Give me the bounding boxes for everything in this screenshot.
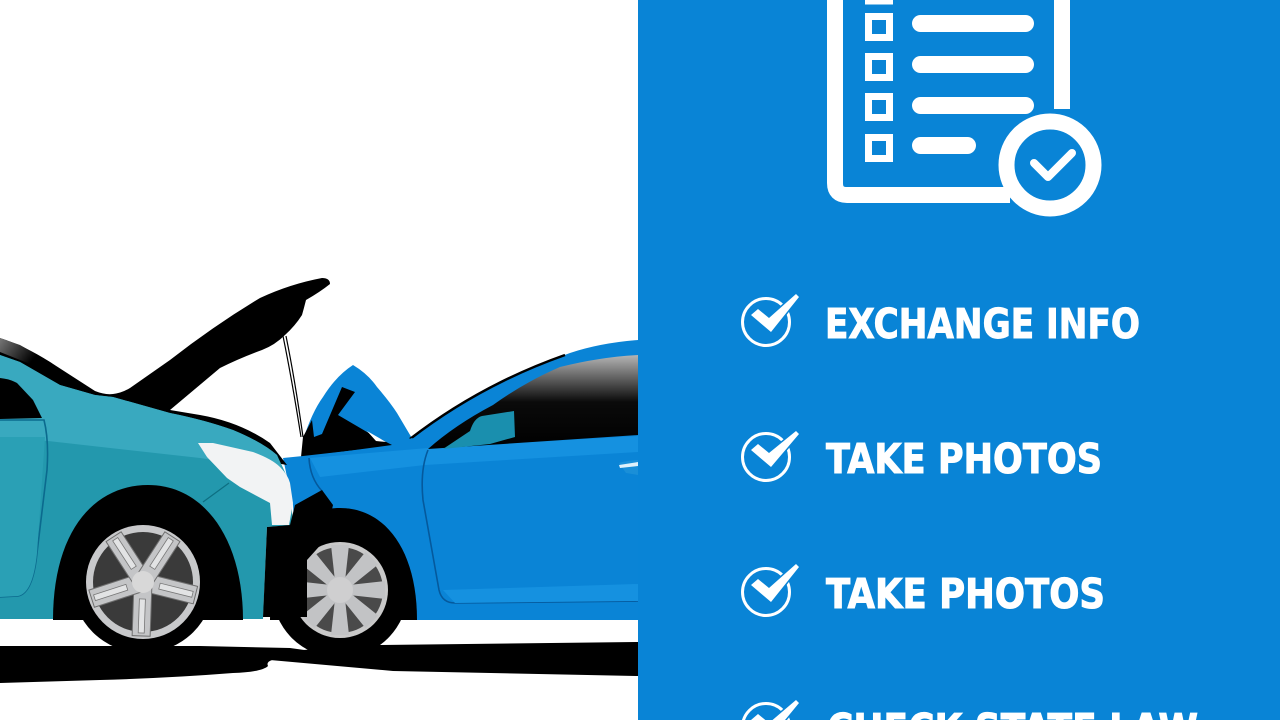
- teal car headlight: [198, 443, 293, 525]
- teal car wheel: [72, 511, 214, 653]
- blue car crumpled hood: [303, 365, 413, 460]
- clipboard check badge: [1006, 122, 1094, 208]
- item: exchange info: [742, 294, 1140, 348]
- teal car hood strut: [283, 336, 301, 437]
- item: check state law: [742, 700, 1198, 720]
- clipboard text lines: [912, 15, 1034, 154]
- bumper in black: [263, 490, 333, 617]
- ground shadow: left car: [0, 646, 340, 683]
- label: EXCHANGE INFO: [825, 300, 1140, 348]
- blue car door outline: [422, 450, 638, 603]
- blue car engine bay: [301, 387, 392, 457]
- blue car door handle: [619, 460, 638, 475]
- clipboard outline: [835, 0, 1062, 195]
- teal car window: [0, 378, 42, 419]
- label: TAKE PHOTOS: [826, 570, 1105, 618]
- blue car roof: [410, 340, 638, 450]
- item: take photos repeated: [742, 564, 1105, 618]
- teal car light upper band: [0, 355, 283, 470]
- teal car raised hood and roof in black: [0, 278, 330, 465]
- icon: clipboard checklist: [835, 0, 1094, 208]
- clipboard checkboxes: [868, 0, 890, 158]
- blue car light belt band: [310, 436, 638, 477]
- icon: check mark: [742, 700, 799, 720]
- blue car tyre: [272, 522, 408, 658]
- blue car window: [428, 355, 638, 449]
- teal car: [0, 278, 333, 653]
- blue car: [270, 340, 638, 658]
- blue car mirror: [443, 411, 515, 449]
- label: TAKE PHOTOS: [826, 435, 1102, 483]
- teal car rim: [86, 525, 200, 639]
- icon: check mark: [742, 431, 799, 480]
- teal car wheel arch: [53, 485, 243, 620]
- teal car tyre: [72, 511, 214, 653]
- teal car fender crease: [203, 483, 229, 502]
- teal car body: [0, 355, 293, 619]
- ground shadow: right car: [270, 642, 638, 676]
- blue car wheel arch: [270, 508, 417, 620]
- blue car wheel: [272, 522, 408, 658]
- icon: check mark: [742, 564, 799, 616]
- panel background: [638, 0, 1280, 720]
- panel: checklist: [638, 0, 1280, 720]
- blue car body: [283, 436, 638, 620]
- blue car rim: [292, 542, 388, 638]
- illustration: two cars in a collision: [0, 278, 638, 683]
- teal car door: [0, 420, 48, 597]
- item: take photos: [742, 431, 1102, 483]
- icon: check mark: [742, 294, 799, 346]
